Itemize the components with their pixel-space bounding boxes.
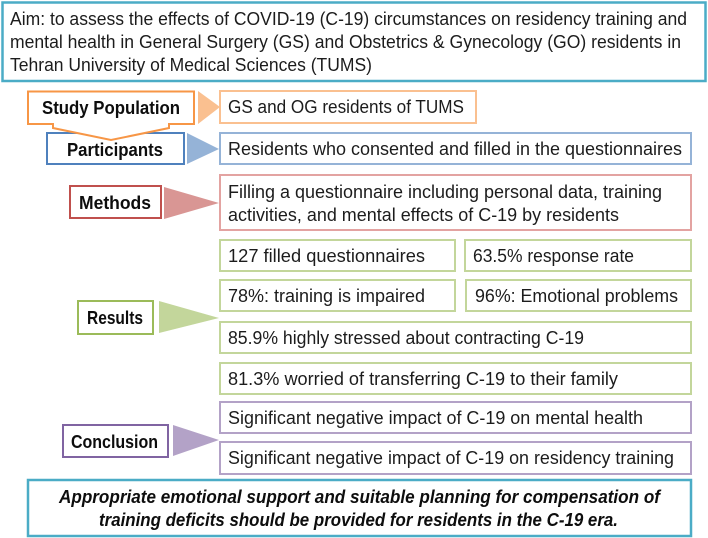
panel: conclusion mental health xyxy=(220,402,691,433)
panel: methods detail: Filling a questionnaire including personal data, training xyxy=(228,182,662,202)
label: study population: Study Population xyxy=(42,98,180,118)
panel: final recommendation: training deficits should be provided for residents in the C-19 era. xyxy=(99,510,618,530)
panel: response rate xyxy=(465,240,691,271)
panel: final recommendation: Appropriate emotional support and suitable planning for compensation of xyxy=(58,487,662,507)
panel: conclusion mental health: Significant negative impact of C-19 on mental health xyxy=(228,408,643,428)
panel: questionnaires count xyxy=(220,240,455,271)
arrow: conclusion xyxy=(173,425,219,456)
panel: aim: Tehran University of Medical Sciences (TUMS) xyxy=(10,55,372,75)
panel: methods detail xyxy=(220,175,691,230)
label: methods xyxy=(70,186,161,218)
panel: study population detail xyxy=(220,91,476,123)
panel: conclusion residency training xyxy=(220,442,691,474)
panel: aim: mental health in General Surgery (GS) and Obstetrics & Gynecology (GO) residents in xyxy=(10,32,681,52)
arrow: methods xyxy=(164,187,219,219)
label: methods: Methods xyxy=(79,193,151,213)
panel: emotional problems xyxy=(466,280,691,311)
panel: stress finding: 85.9% highly stressed about contracting C-19 xyxy=(228,328,584,348)
panel: training impaired xyxy=(220,280,455,311)
panel: emotional problems: 96%: Emotional problems xyxy=(475,286,678,306)
panel: family worry finding: 81.3% worried of transferring C-19 to their family xyxy=(228,369,618,389)
panel: family worry finding xyxy=(220,363,691,394)
label: participants xyxy=(47,133,184,164)
label: participants: Participants xyxy=(67,140,163,160)
label: results: Results xyxy=(87,308,143,328)
label: conclusion: Conclusion xyxy=(71,432,158,452)
panel: methods detail: activities, and mental effects of C-19 by residents xyxy=(228,205,619,225)
label: results xyxy=(78,301,153,334)
panel: participants detail xyxy=(220,133,691,164)
panel: response rate: 63.5% response rate xyxy=(473,246,634,266)
panel: questionnaires count: 127 filled questionnaires xyxy=(228,246,425,266)
label: study population xyxy=(28,92,194,140)
label: conclusion xyxy=(63,425,168,457)
panel: participants detail: Residents who consented and filled in the questionnaires xyxy=(228,139,682,159)
arrow: participants xyxy=(187,133,219,164)
arrow: study population xyxy=(198,91,220,124)
panel: aim: Aim: to assess the effects of COVID-19 (C-19) circumstances on residency training and xyxy=(10,9,687,29)
panel: aim xyxy=(2,2,706,81)
panel: final recommendation xyxy=(28,480,691,536)
panel: study population detail: GS and OG residents of TUMS xyxy=(228,97,464,117)
panel: conclusion residency training: Significant negative impact of C-19 on residency training xyxy=(228,448,674,468)
arrow: results xyxy=(159,301,219,333)
panel: stress finding xyxy=(220,322,691,353)
panel: training impaired: 78%: training is impaired xyxy=(228,286,425,306)
